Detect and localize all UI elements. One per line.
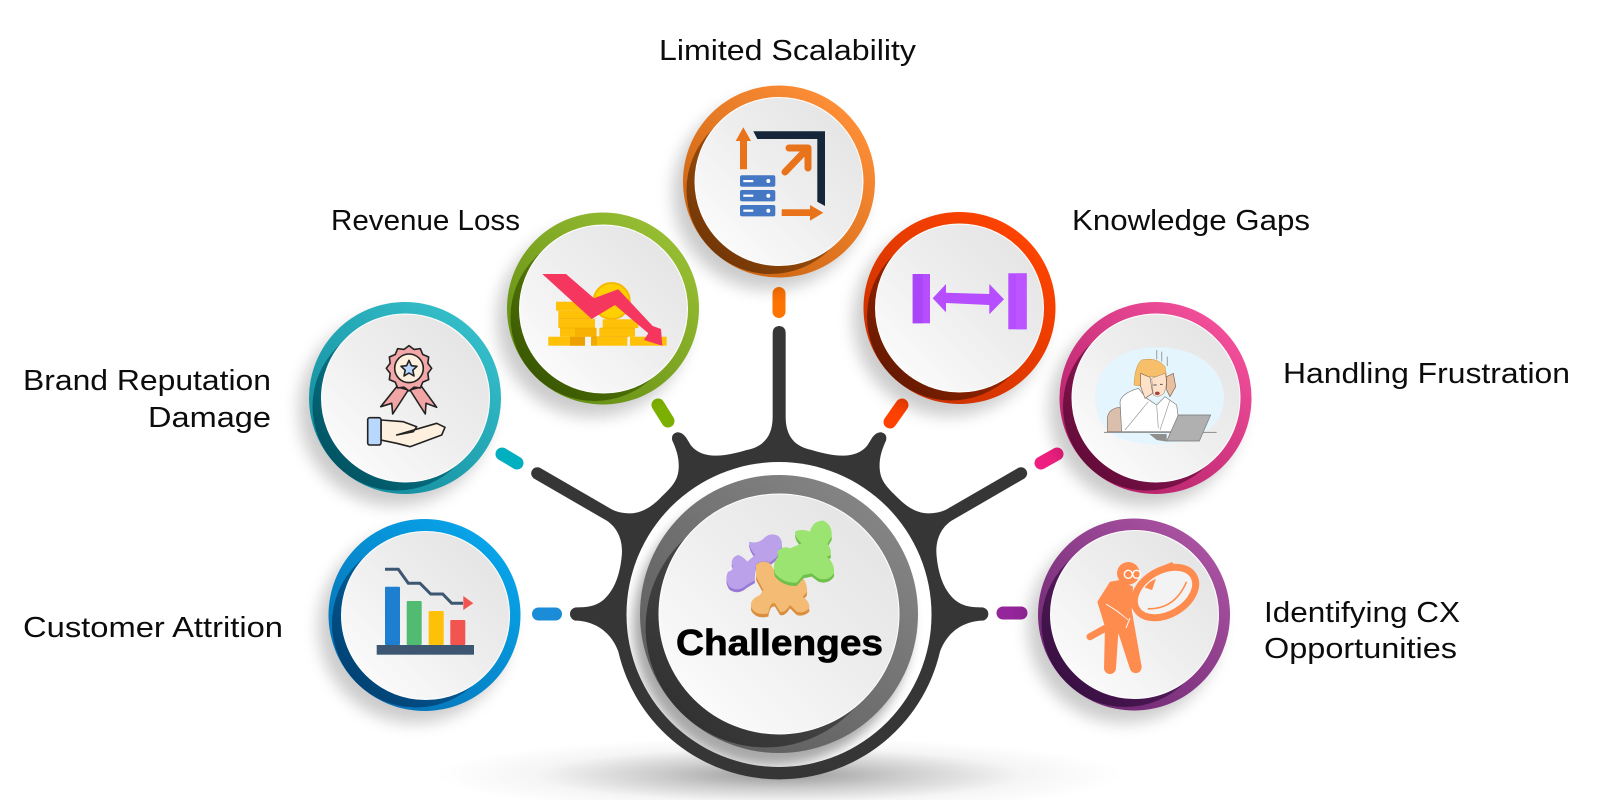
- label: Identifying CX: [1264, 597, 1460, 629]
- icon: person with magnifying glass: [1090, 557, 1205, 674]
- icon: frustrated woman at laptop: [1095, 347, 1224, 444]
- central hub connector: [531, 326, 1027, 779]
- node: Handling Frustration: [1041, 302, 1570, 506]
- label: Limited Scalability: [659, 35, 917, 67]
- dash connector: [772, 294, 786, 312]
- icon: declining bar chart: [377, 569, 474, 655]
- node: Revenue Loss: [331, 205, 699, 421]
- label: Revenue Loss: [331, 205, 520, 237]
- icon: coins with falling arrow: [542, 274, 667, 346]
- label: Damage: [148, 402, 271, 434]
- dash connector: [890, 405, 902, 422]
- label: [1264, 597, 1460, 665]
- floor shadow: [434, 737, 1124, 800]
- icon: scalability arrows and server: [736, 127, 825, 221]
- dash connector: [538, 608, 556, 620]
- title: Challenges: [676, 622, 883, 663]
- icon: award ribbon over hand: [368, 346, 445, 447]
- dash connector: [1003, 606, 1021, 620]
- node: Limited Scalability: [659, 35, 917, 312]
- icon: puzzle pieces: [726, 521, 834, 617]
- label: Customer Attrition: [23, 612, 283, 644]
- central circle: [626, 462, 932, 767]
- dash connector: [1041, 454, 1057, 463]
- node: Knowledge Gaps: [854, 205, 1310, 422]
- node: Identifying CX Opportunities: [1003, 518, 1460, 723]
- label: Knowledge Gaps: [1072, 205, 1310, 237]
- label: Opportunities: [1264, 633, 1457, 665]
- dash connector: [658, 405, 668, 421]
- icon: gap arrow between bars: [913, 273, 1027, 329]
- dash connector: [502, 454, 517, 463]
- node: Brand Reputation Damage: [23, 302, 517, 506]
- node: Customer Attrition: [23, 519, 556, 723]
- label: [23, 365, 271, 434]
- label: Handling Frustration: [1283, 358, 1570, 390]
- label: Brand Reputation: [23, 365, 271, 397]
